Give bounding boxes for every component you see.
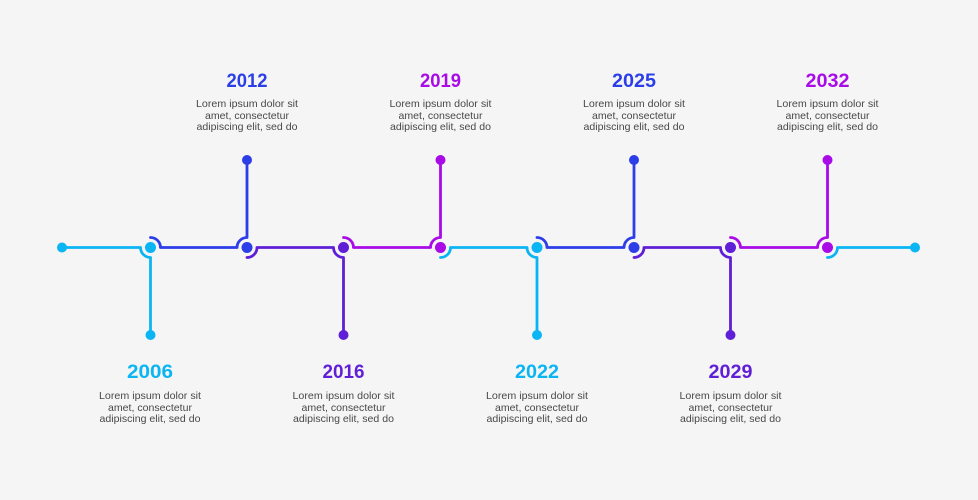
marker: 2006 node: [145, 242, 156, 253]
marker: 2019 node: [435, 242, 446, 253]
text: 2022 description: [486, 390, 588, 425]
marker: start of line: [57, 242, 67, 252]
text: 2012 description: adipiscing elit, sed do: [196, 121, 298, 133]
text: 2022 description: adipiscing elit, sed do: [486, 413, 588, 425]
text: 2025 description: adipiscing elit, sed do: [584, 121, 685, 133]
connector: 2019: [344, 160, 440, 248]
text: 2006 description: amet, consectetur: [108, 402, 192, 414]
line end segment: [828, 242, 920, 258]
connector: 2032: [730, 160, 828, 248]
text: 2006 description: Lorem ipsum dolor sit: [99, 390, 201, 402]
text: 2032 description: adipiscing elit, sed do: [777, 121, 878, 133]
text: 2025 description: Lorem ipsum dolor sit: [583, 98, 685, 110]
text: 2012 description: Lorem ipsum dolor sit: [196, 98, 298, 110]
marker: 2006 end: [146, 330, 156, 340]
text: 2029 description: adipiscing elit, sed do: [680, 413, 781, 425]
connector: 2016: [247, 248, 344, 335]
text: 2019 description: [390, 98, 492, 133]
year: 2006: 2006: [127, 362, 173, 383]
marker: 2022 end: [532, 330, 542, 340]
text: 2019 description: amet, consectetur: [398, 110, 483, 122]
text: 2032 description: [776, 98, 879, 133]
year: 2022: 2022: [515, 362, 559, 383]
text: 2022 description: Lorem ipsum dolor sit: [486, 390, 588, 402]
milestone 2022: [440, 242, 588, 425]
milestone 2029: [634, 242, 782, 425]
year: 2012: 2012: [226, 71, 268, 92]
connector: 2012: [150, 160, 247, 248]
text: 2006 description: [99, 390, 201, 425]
milestone 2019: [344, 71, 492, 253]
connector: 2029: [634, 248, 730, 335]
marker: 2025 end: [629, 155, 639, 165]
text: 2032 description: Lorem ipsum dolor sit: [776, 98, 879, 110]
text: 2016 description: Lorem ipsum dolor sit: [292, 390, 395, 402]
text: 2025 description: [583, 98, 685, 133]
text: 2016 description: amet, consectetur: [302, 402, 386, 414]
text: 2019 description: adipiscing elit, sed do: [390, 121, 491, 133]
text: 2006 description: adipiscing elit, sed do: [100, 413, 201, 425]
text: 2012 description: [196, 98, 298, 133]
connector: 2006: [62, 248, 150, 335]
marker: 2029 node: [725, 242, 736, 253]
text: 2032 description: amet, consectetur: [786, 110, 870, 122]
marker: 2032 node: [822, 242, 833, 253]
marker: end of line: [910, 242, 920, 252]
marker: 2012 end: [242, 155, 252, 165]
year: 2019: 2019: [420, 71, 461, 92]
year: 2032: 2032: [806, 71, 850, 92]
marker: 2012 node: [242, 242, 252, 253]
text: 2029 description: [680, 390, 782, 425]
milestone 2006: [57, 242, 201, 425]
marker: 2029 end: [726, 330, 736, 340]
connector: final segment: [828, 248, 915, 258]
text: 2025 description: amet, consectetur: [592, 110, 676, 122]
text: 2022 description: amet, consectetur: [495, 402, 579, 414]
connector: 2022: [440, 248, 537, 335]
marker: 2032 end: [822, 155, 832, 165]
marker: 2022 node: [532, 242, 542, 253]
marker: 2016 node: [338, 242, 349, 253]
year: 2029: 2029: [708, 362, 752, 383]
text: 2012 description: amet, consectetur: [205, 110, 289, 122]
milestone 2012: [150, 71, 298, 253]
marker: 2016 end: [338, 330, 348, 340]
marker: 2019 end: [436, 155, 446, 165]
text: 2016 description: [292, 390, 395, 425]
text: 2029 description: Lorem ipsum dolor sit: [680, 390, 782, 402]
text: 2019 description: Lorem ipsum dolor sit: [390, 98, 492, 110]
connector: 2025: [537, 160, 634, 248]
milestone 2016: [247, 242, 395, 425]
milestone 2032: [730, 71, 879, 253]
year: 2016: 2016: [322, 362, 364, 383]
milestone 2025: [537, 71, 685, 253]
year: 2025: 2025: [612, 71, 656, 92]
marker: 2025 node: [628, 242, 640, 253]
text: 2029 description: amet, consectetur: [688, 402, 773, 414]
text: 2016 description: adipiscing elit, sed do: [293, 413, 394, 425]
